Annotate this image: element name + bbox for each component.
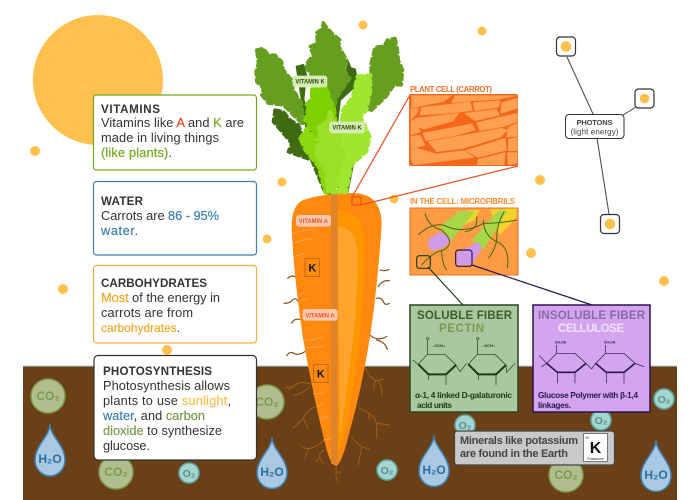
panel: water: Carrots are 86 - 95% — [101, 208, 219, 223]
panel: carbohydrates — [94, 266, 256, 343]
water drops: H₂O — [38, 452, 62, 466]
soluble fiber panel: acid units — [417, 400, 452, 410]
carrot body — [292, 193, 382, 466]
carbon dioxide circles: CO₂ — [36, 389, 60, 403]
insoluble fiber heading: INSOLUBLE FIBER — [538, 310, 646, 322]
zoom lines from carrot to plant cell — [352, 95, 518, 205]
insoluble fiber caption: Glucose Polymer with β-1,4 — [538, 391, 638, 400]
water drops: H₂O — [260, 465, 284, 479]
panel: photosynthesis: glucose. — [103, 438, 150, 453]
cellulose molecule — [539, 341, 644, 383]
panel: water: water. — [100, 223, 138, 238]
panel: vitamins: Vitamins like A and K are — [101, 115, 244, 130]
vitamin K label upper: VITAMIN K — [295, 80, 325, 86]
potassium card lower — [314, 365, 328, 383]
microfibrils panel — [410, 208, 518, 275]
insoluble fiber panel: linkages. — [538, 401, 571, 410]
plant cell panel — [409, 94, 518, 166]
water drops: H₂O — [422, 463, 446, 477]
callout: minerals — [454, 431, 614, 465]
photon marker right — [635, 89, 654, 108]
water drops: H₂O — [644, 468, 668, 482]
potassium card upper: K — [308, 263, 316, 275]
vitamin K label lower: VITAMIN K — [332, 126, 362, 132]
potassium element card: 19 — [585, 436, 589, 440]
oxygen circles: O₂ — [183, 468, 196, 480]
panel: vitamins: made in living things — [101, 130, 219, 145]
potassium card upper — [305, 259, 319, 277]
pectin molecule: O — [426, 336, 430, 341]
vitamin A label lower: VITAMIN A — [305, 313, 335, 319]
carbon dioxide circles: CO₂ — [554, 468, 578, 482]
connector lines to fiber panels — [428, 265, 592, 305]
callout: minerals: Minerals like potassium — [460, 435, 578, 447]
carbon dioxide circles: CO₂ — [255, 395, 279, 409]
panel: photosynthesis: plants to use sunlight, — [103, 393, 231, 408]
plant cell heading: PLANT CELL (CARROT) — [410, 85, 492, 94]
panel: vitamins: (like plants). — [101, 145, 172, 160]
panel: photosynthesis: water, and carbon — [102, 408, 205, 423]
carrot leaves — [256, 23, 403, 193]
photons label: (light energy) — [570, 128, 619, 136]
roots below ground — [286, 368, 390, 483]
microfibrils heading: IN THE CELL: MICROFIBRILS — [410, 197, 515, 206]
floating light dots — [30, 20, 669, 355]
panel: photosynthesis — [94, 356, 256, 460]
panel: vitamins — [94, 95, 256, 170]
soluble fiber caption: α-1, 4 linked D-galaturonic — [415, 390, 512, 400]
sun — [33, 15, 163, 145]
oxygen circles: O₂ — [381, 465, 394, 477]
panel: water — [94, 182, 256, 255]
soil — [23, 366, 677, 500]
pectin molecule: O — [476, 336, 480, 341]
panel: photosynthesis: Photosynthesis allows — [103, 378, 230, 393]
cellulose heading: CELLULOSE — [558, 323, 624, 335]
photons label: PHOTONS — [576, 118, 612, 127]
photon marker bottom — [600, 214, 620, 234]
pectin molecule: - OCH₃ — [482, 343, 495, 348]
pectin molecule: - OCH₃ — [432, 343, 445, 348]
potassium element card: Potassium — [587, 457, 604, 461]
soluble fiber panel — [410, 305, 518, 412]
photon marker top — [556, 37, 576, 56]
panel: carbohydrates: CARBOHYDRATES — [101, 277, 207, 290]
oxygen circles: O₂ — [459, 420, 472, 432]
pectin molecule — [413, 336, 515, 385]
panel: carbohydrates: Most of the energy in — [101, 290, 220, 305]
vitamin K label upper — [293, 76, 327, 87]
photons label — [566, 114, 624, 138]
cellulose molecule: CH₂OH — [555, 341, 567, 345]
oxygen circles — [179, 389, 674, 483]
carbon dioxide circles: CO₂ — [104, 465, 128, 479]
potassium card lower: K — [317, 369, 325, 381]
panel: carbohydrates: carbohydrates. — [101, 321, 180, 335]
carbon dioxide circles — [31, 379, 583, 492]
pectin heading: PECTIN — [439, 323, 484, 335]
panel: photosynthesis: PHOTOSYNTHESIS — [103, 365, 212, 378]
photon connector lines — [567, 57, 636, 214]
potassium element card: K — [590, 440, 602, 457]
vitamin A label upper: VITAMIN A — [299, 219, 329, 225]
oxygen circles: O₂ — [595, 415, 608, 427]
panel: vitamins: VITAMINS — [101, 103, 160, 116]
panel: photosynthesis: dioxide to synthesize — [103, 423, 222, 438]
water drops — [35, 424, 671, 492]
roots above ground — [284, 269, 389, 356]
panel: water: WATER — [101, 195, 144, 208]
potassium element card — [584, 434, 608, 462]
cellulose molecule: CH₂OH — [604, 341, 616, 345]
vitamin A label lower — [303, 309, 338, 321]
callout: minerals: are found in the Earth — [460, 448, 568, 460]
carrot with roots — [284, 193, 390, 483]
oxygen circles: O₂ — [658, 394, 671, 406]
soluble fiber heading: SOLUBLE FIBER — [417, 310, 513, 322]
insoluble fiber panel — [533, 305, 650, 412]
vitamin K label lower — [329, 122, 365, 133]
vitamin A label upper — [296, 215, 331, 227]
panel: carbohydrates: carrots are from — [101, 305, 193, 320]
